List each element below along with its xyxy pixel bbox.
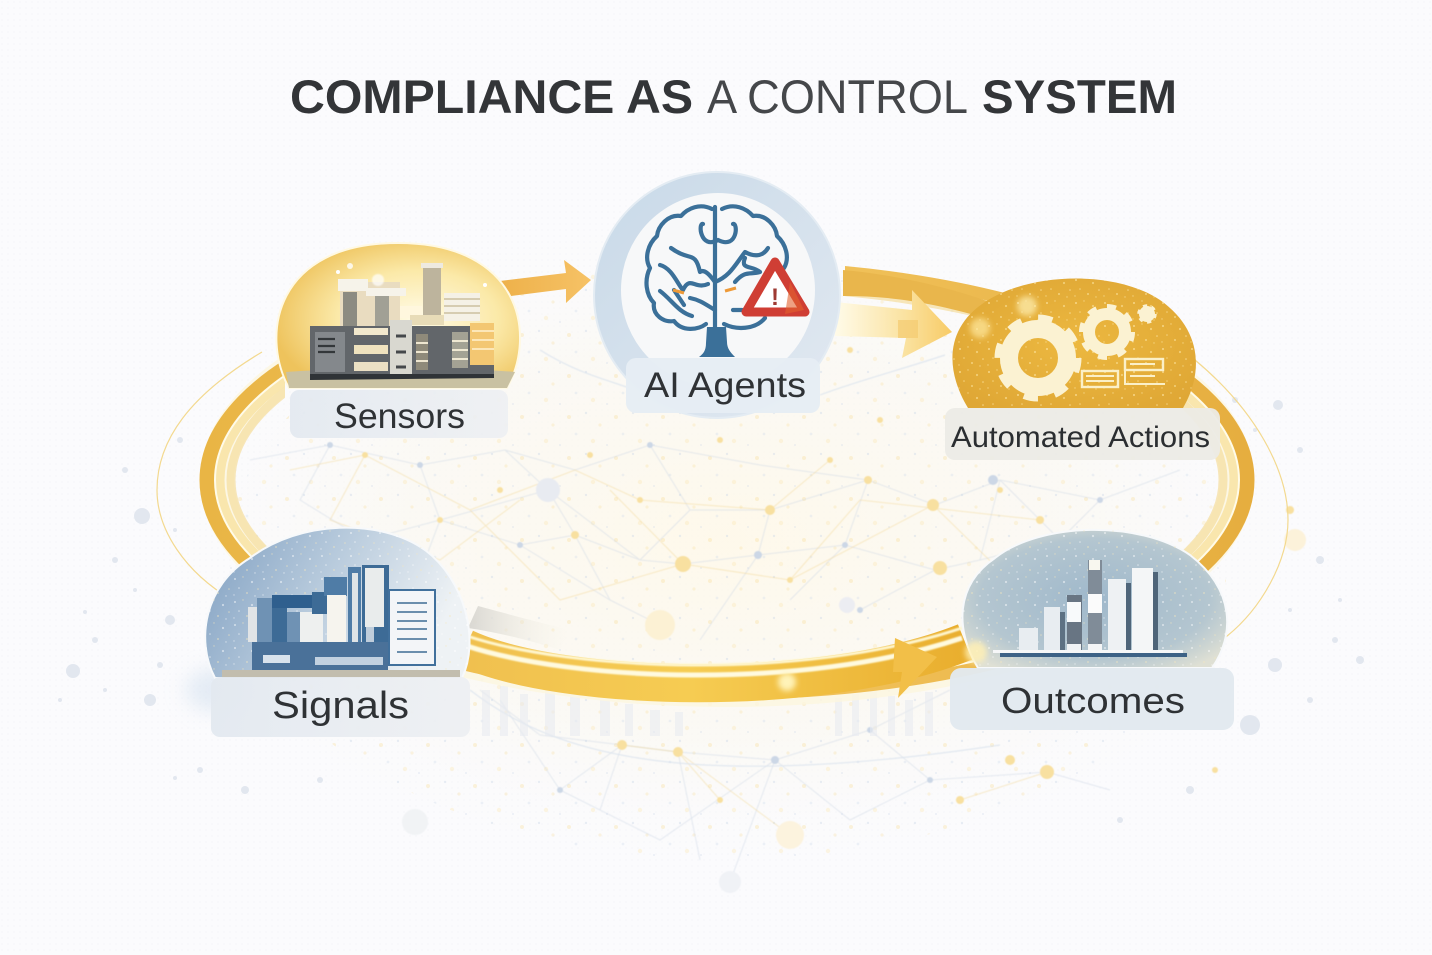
title: SYSTEM bbox=[982, 70, 1177, 123]
label: Automated Actions: Automated Actions bbox=[951, 421, 1210, 454]
dome: sensors bbox=[276, 243, 520, 388]
node: outcomes bbox=[950, 530, 1234, 730]
thin outer orbit lines bbox=[157, 352, 1288, 640]
title: COMPLIANCE AS bbox=[290, 70, 693, 123]
label: Outcomes: Outcomes bbox=[1001, 680, 1185, 721]
network nodes: pale large bbox=[402, 478, 1306, 893]
arrow: sensors to AI agents bbox=[500, 260, 591, 303]
label: Sensors: Sensors bbox=[334, 397, 465, 436]
icon: action cards bbox=[1082, 359, 1165, 387]
title: A CONTROL bbox=[707, 70, 968, 123]
label: Signals: Signals bbox=[272, 685, 409, 727]
faint bar chart ghosts bbox=[482, 686, 933, 736]
title bbox=[290, 70, 1177, 123]
dome: automated actions bbox=[952, 278, 1196, 408]
dome: AI agents bbox=[594, 172, 840, 418]
label: AI Agents: AI Agents bbox=[644, 366, 806, 405]
control loop ring bbox=[207, 268, 1247, 692]
network nodes: gold bbox=[362, 347, 1294, 804]
icon: warning triangle bbox=[746, 262, 805, 314]
icon: gears bbox=[999, 306, 1155, 397]
label: Outcomes bbox=[950, 668, 1234, 730]
dome: signals bbox=[205, 528, 470, 678]
arrow: outcomes loop bbox=[893, 638, 937, 698]
label: AI Agents bbox=[626, 358, 820, 413]
icon: brain bbox=[647, 206, 787, 340]
node: sensors bbox=[276, 243, 520, 438]
label: Signals bbox=[211, 677, 470, 737]
icon: bar chart bbox=[993, 560, 1187, 657]
icon: warning triangle: ! bbox=[771, 284, 779, 311]
node: AI agents bbox=[594, 172, 840, 418]
scattered particles left bbox=[58, 397, 1364, 823]
label: Sensors bbox=[290, 390, 508, 438]
network mesh background bbox=[250, 347, 1306, 893]
dome: outcomes bbox=[962, 530, 1227, 668]
icon: document bbox=[389, 590, 435, 665]
icon: industrial facility bbox=[310, 263, 494, 380]
arrow: AI agents to automated actions bbox=[835, 290, 952, 358]
icon: signal dashboard bbox=[248, 565, 435, 670]
label: Automated Actions bbox=[945, 408, 1220, 460]
bottom ring band bbox=[465, 606, 965, 691]
node: signals bbox=[185, 528, 470, 737]
node: automated actions bbox=[945, 278, 1220, 460]
top-right ring segment bbox=[843, 270, 990, 318]
network nodes: blue bbox=[327, 442, 1103, 793]
